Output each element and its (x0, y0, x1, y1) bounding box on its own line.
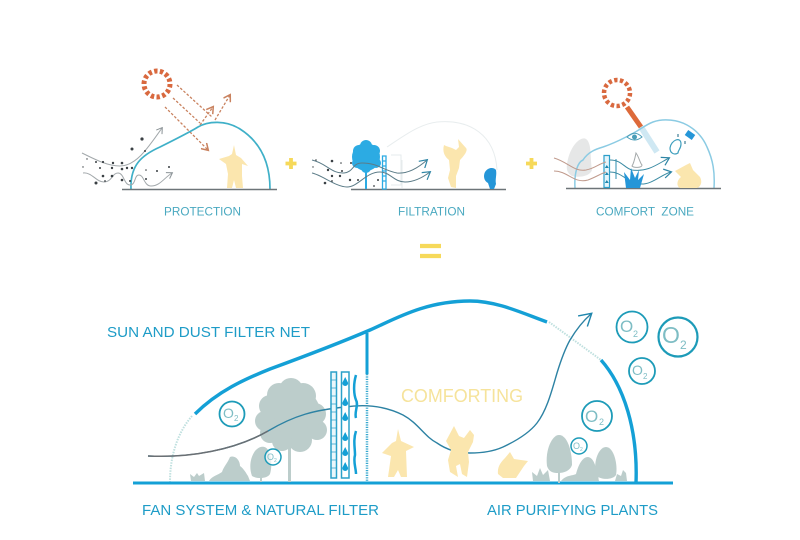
ground line (122, 188, 277, 190)
plus sign 2 (526, 158, 537, 169)
icon: blue tree (352, 140, 381, 189)
dust particles (312, 159, 379, 187)
fan blades (354, 375, 357, 474)
oxygen bubble: O (585, 407, 598, 426)
sun rays and reflections (165, 85, 230, 150)
oxygen bubble: 2 (599, 417, 604, 427)
dome outline (131, 122, 270, 189)
figure: standing person (382, 429, 414, 477)
equals sign (420, 246, 441, 256)
small tree (250, 447, 271, 478)
diagram: filtration (312, 122, 506, 218)
oxygen bubble: O (620, 317, 633, 336)
tree (255, 378, 327, 482)
dome outline (575, 120, 714, 188)
roof structure (195, 301, 547, 414)
diagram: protection (82, 71, 277, 218)
oxygen bubble (629, 358, 655, 384)
figure: dancing person (443, 139, 467, 188)
label: fan system and natural filter: FAN SYSTEM & NATURAL FILTER (142, 503, 379, 519)
label: comfort zone: COMFORT ZONE (596, 206, 694, 218)
fan system and filter (331, 372, 357, 478)
oxygen bubble: O (573, 441, 580, 451)
figure: person (219, 145, 248, 188)
figure: cat (498, 452, 528, 478)
shrub (209, 457, 250, 481)
vertical post (366, 333, 368, 374)
oxygen bubble: O (267, 452, 274, 462)
ground line (566, 188, 721, 190)
water drops (342, 377, 348, 471)
main section diagram (107, 301, 698, 519)
oxygen bubble: 2 (234, 414, 239, 423)
filter panel (382, 156, 386, 189)
wind arrows (312, 160, 430, 187)
icon: ear (670, 140, 681, 154)
icon: yellow cat (675, 163, 701, 188)
oxygen bubble: 2 (680, 338, 687, 352)
ground line (133, 482, 673, 484)
comforting label: COMFORTING (401, 386, 523, 406)
oxygen bubble: O (632, 362, 643, 378)
oxygen bubble (571, 438, 587, 454)
music notes (678, 134, 685, 144)
filter panel (604, 156, 610, 188)
oxygen bubble (265, 449, 281, 465)
oxygen bubble: 2 (643, 372, 648, 381)
grey mountain (567, 138, 592, 177)
dotted openings (170, 322, 601, 482)
dust particles (82, 137, 170, 184)
oxygen bubble (616, 312, 648, 342)
wind arrows (554, 158, 606, 170)
icon: sun (144, 71, 170, 97)
diagram: comfort zone (554, 80, 721, 218)
oxygen bubble: 2 (580, 447, 583, 453)
figure: dancing person (446, 426, 474, 477)
oxygen bubble (658, 318, 698, 356)
faint dome outline (387, 122, 497, 170)
air flow curve (148, 314, 591, 456)
label: air purifying plants: AIR PURIFYING PLANTS (487, 503, 658, 519)
label: protection: PROTECTION (164, 206, 241, 218)
roof filter (686, 132, 694, 138)
grass (190, 473, 205, 481)
oxygen bubble: 2 (633, 329, 638, 339)
oxygen bubble (220, 402, 244, 426)
icon: sun (604, 80, 630, 106)
icon: eye (627, 133, 642, 140)
ground line (351, 188, 506, 190)
sun beam (627, 107, 641, 127)
icon: nose (632, 153, 642, 167)
oxygen bubbles (220, 312, 698, 465)
right end wall (601, 360, 636, 483)
icon: blue shrub (484, 168, 496, 189)
oxygen bubble: O (223, 405, 234, 421)
oxygen bubble: O (662, 322, 680, 348)
trees and plants left (190, 378, 327, 482)
plants right (532, 435, 627, 483)
wind arrows (82, 128, 172, 186)
plus sign 1 (286, 158, 296, 169)
label: sun and dust filter net: SUN AND DUST FILTER NET (107, 325, 310, 341)
icon: blue grass (624, 168, 644, 188)
filter drops (605, 165, 609, 183)
label: filtration: FILTRATION (398, 206, 465, 218)
oxygen bubble: 2 (274, 458, 277, 464)
oxygen bubble (582, 401, 612, 431)
